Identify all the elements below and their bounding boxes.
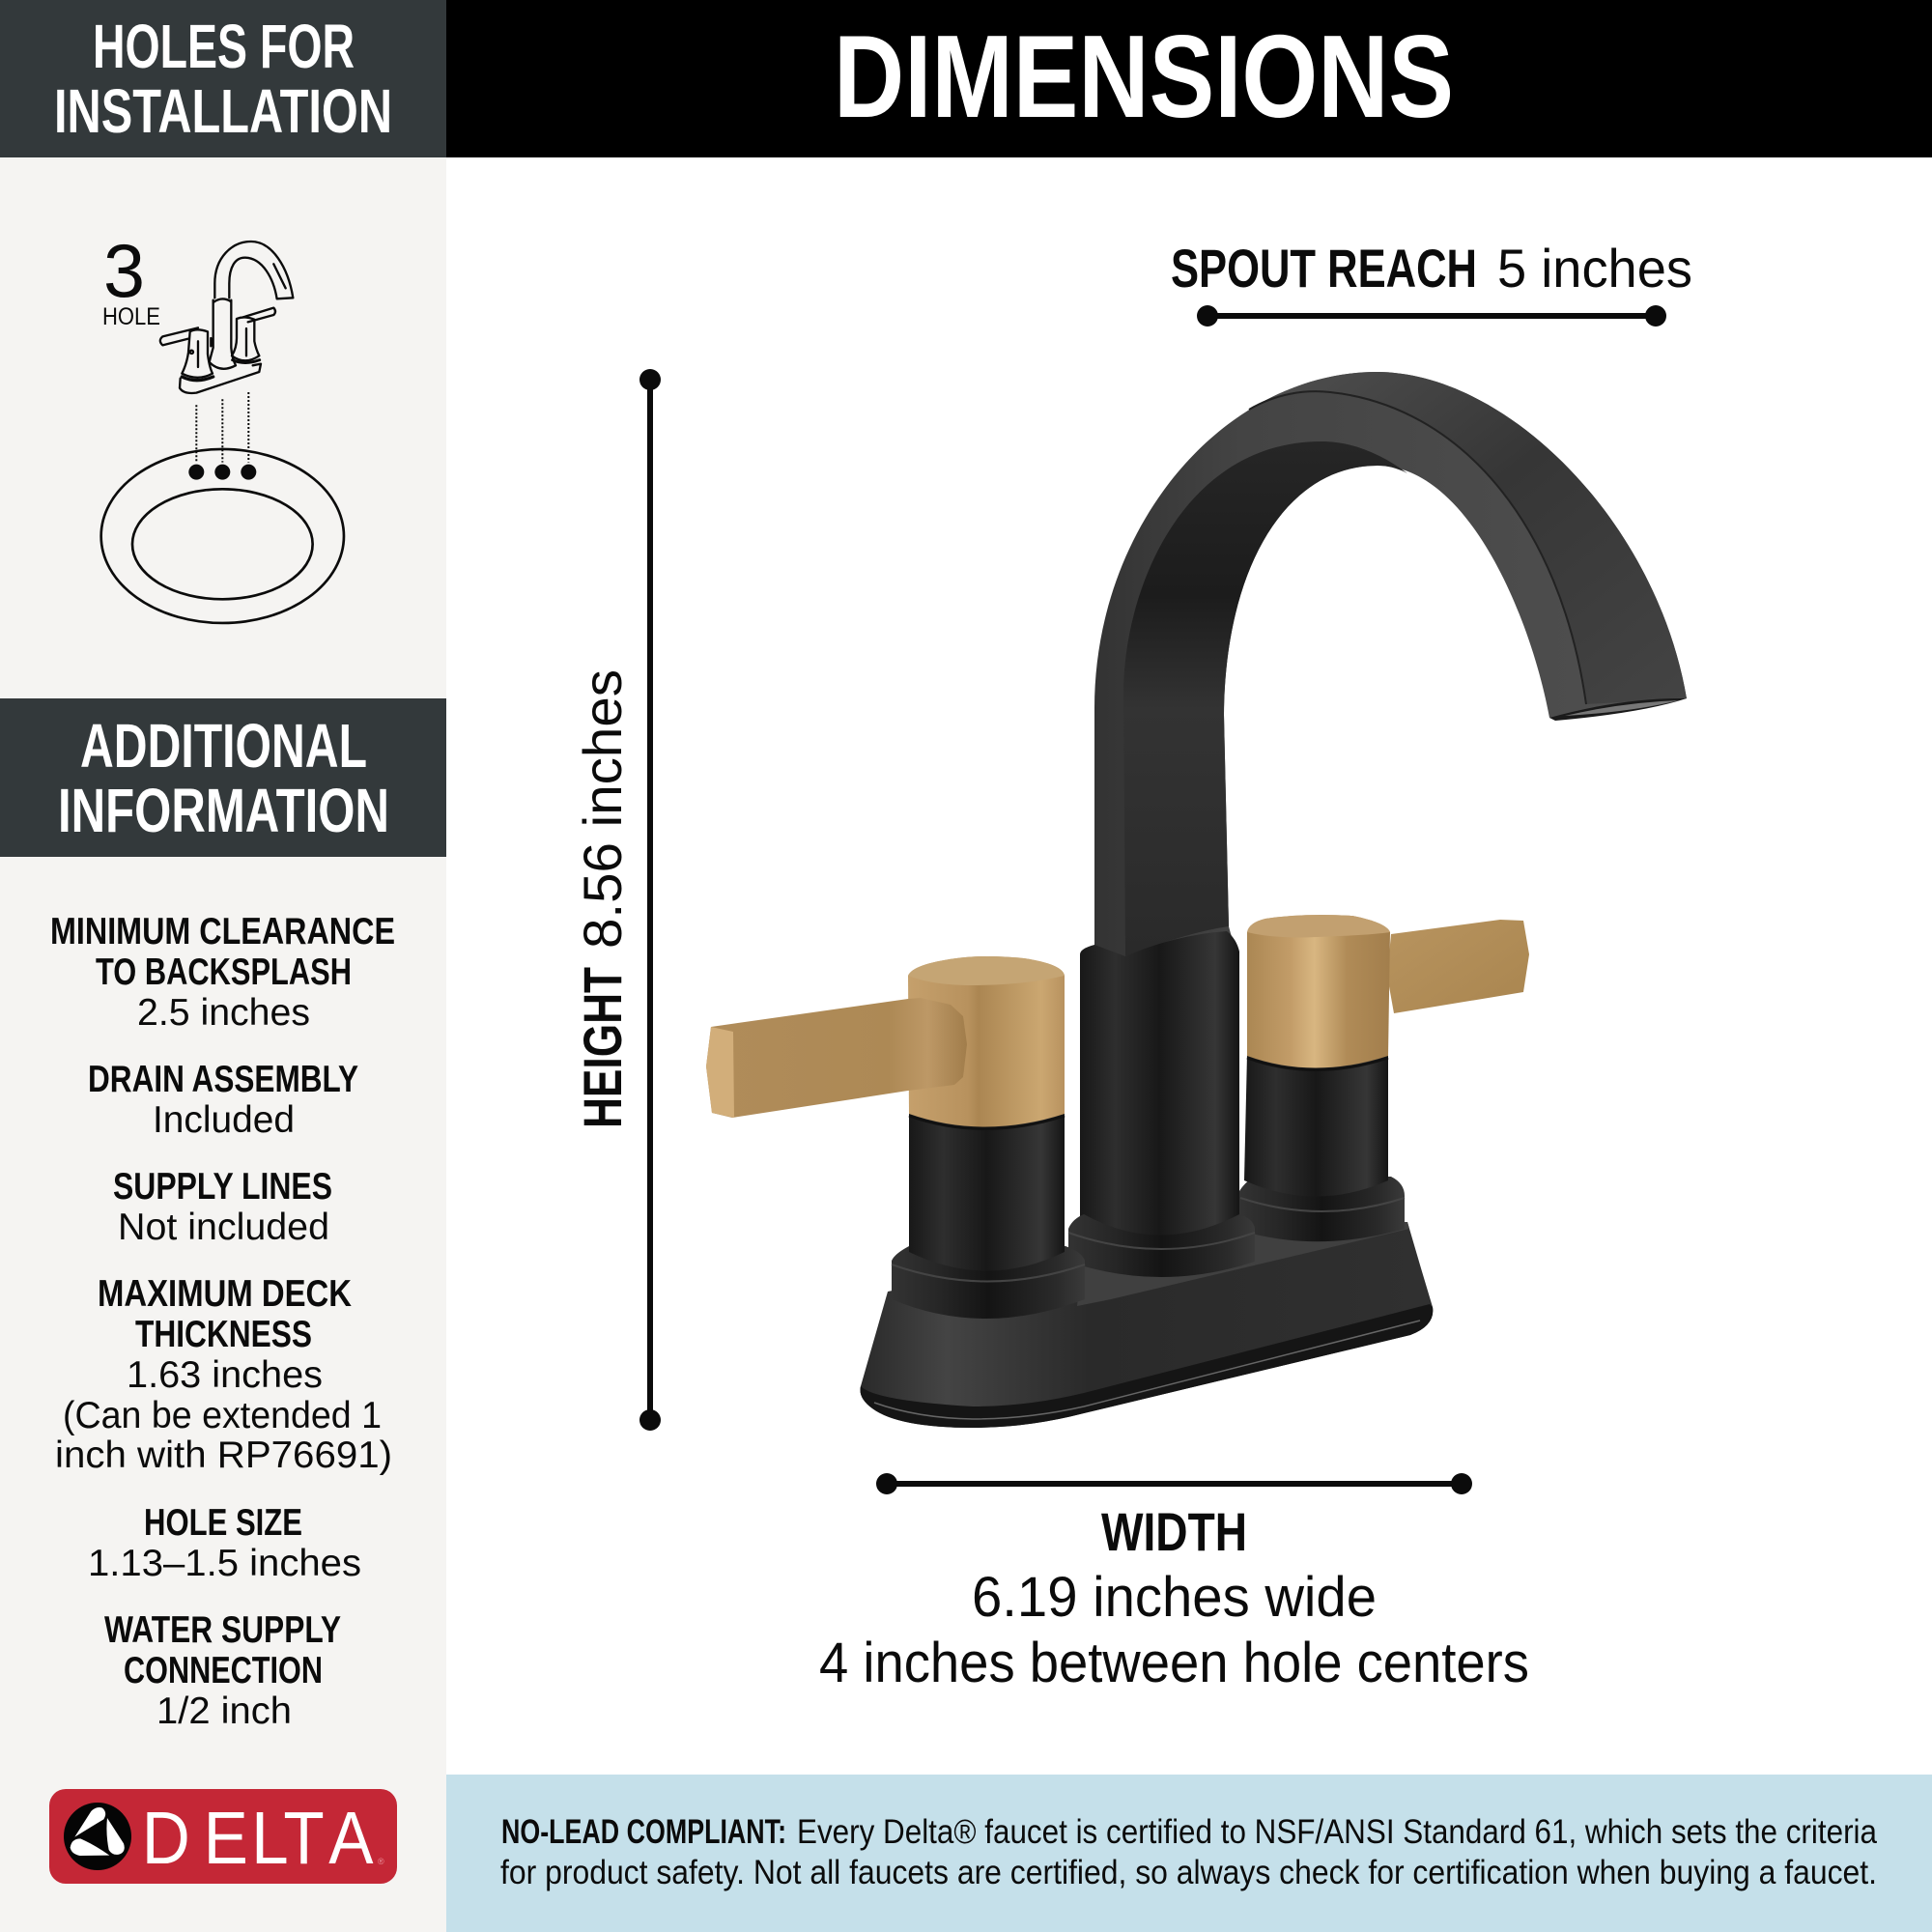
left sidebar panel [0, 0, 446, 1932]
dotted alignment lines [196, 392, 248, 463]
dimension: height [572, 369, 661, 1431]
dimension: spout reach: SPOUT REACH [1171, 238, 1477, 298]
dimension: width [819, 1473, 1529, 1694]
header: holes for installation: HOLES FOR [93, 12, 355, 81]
spec: maximum deck thickness: THICKNESS [135, 1314, 312, 1355]
dimension: width: 4 inches between hole centers [819, 1632, 1529, 1694]
label: 3 hole [102, 228, 160, 330]
spec: water supply connection: WATER SUPPLY [104, 1609, 341, 1651]
spec: water supply connection [104, 1609, 341, 1732]
callout: no-lead compliant: NO-LEAD COMPLIANT: [501, 1813, 786, 1851]
mounting holes [188, 465, 256, 480]
header: dimensions title bar [446, 0, 1932, 157]
label: 3 hole: 3 [103, 228, 145, 313]
spec: maximum deck thickness: inch with RP76691) [55, 1435, 392, 1476]
icon: faucet line drawing [160, 242, 293, 393]
header: holes for installation: INSTALLATION [54, 76, 392, 146]
left handle [706, 956, 1085, 1319]
spec: maximum deck thickness [55, 1273, 392, 1476]
spec: hole size: HOLE SIZE [144, 1502, 302, 1544]
spec: water supply connection: 1/2 inch [156, 1690, 292, 1732]
dimension: spout reach: 5 inches [1497, 238, 1692, 298]
title: dimensions: DIMENSIONS [834, 11, 1454, 142]
right handle [1239, 915, 1529, 1241]
spec: maximum deck thickness: 1.63 inches [127, 1354, 323, 1396]
base plate [860, 1222, 1433, 1428]
spec: hole size [88, 1502, 361, 1584]
spec: minimum clearance [50, 911, 395, 1034]
spec: maximum deck thickness: MAXIMUM DECK [98, 1273, 352, 1315]
spec: water supply connection: CONNECTION [124, 1650, 323, 1691]
spec: drain assembly: DRAIN ASSEMBLY [88, 1059, 358, 1100]
center body [1068, 931, 1255, 1277]
logo: delta: DELTA [142, 1797, 374, 1880]
header: additional information [0, 698, 446, 857]
logo: delta [49, 1789, 397, 1884]
spec: supply lines: Not included [118, 1207, 329, 1248]
dimension: height: 8.56 inches [572, 669, 633, 949]
dimension: width: 6.19 inches wide [972, 1566, 1377, 1629]
dimension: spout reach [1171, 238, 1692, 327]
callout: no-lead compliant [446, 1775, 1932, 1932]
spec: drain assembly [88, 1059, 358, 1141]
spout [1094, 372, 1687, 956]
spec: hole size: 1.13–1.5 inches [88, 1543, 361, 1584]
spec: minimum clearance: MINIMUM CLEARANCE [50, 911, 395, 952]
logo: delta: ® [378, 1857, 384, 1866]
spec: supply lines [113, 1166, 332, 1248]
dimension: height: HEIGHT [572, 967, 633, 1128]
spec: supply lines: SUPPLY LINES [113, 1166, 332, 1208]
label: 3 hole: HOLE [102, 303, 160, 330]
spec: minimum clearance: TO BACKSPLASH [96, 952, 352, 993]
icon: sink with three holes [101, 392, 344, 623]
header: additional information: INFORMATION [58, 776, 389, 845]
product: black and gold faucet [706, 372, 1687, 1428]
spec: drain assembly: Included [153, 1099, 295, 1141]
header: additional information: ADDITIONAL [80, 711, 367, 781]
header: holes for installation [0, 0, 446, 157]
spec: minimum clearance: 2.5 inches [137, 992, 310, 1034]
dimension: width: WIDTH [1101, 1501, 1247, 1562]
spec: maximum deck thickness: (Can be extended 1 [63, 1395, 382, 1436]
